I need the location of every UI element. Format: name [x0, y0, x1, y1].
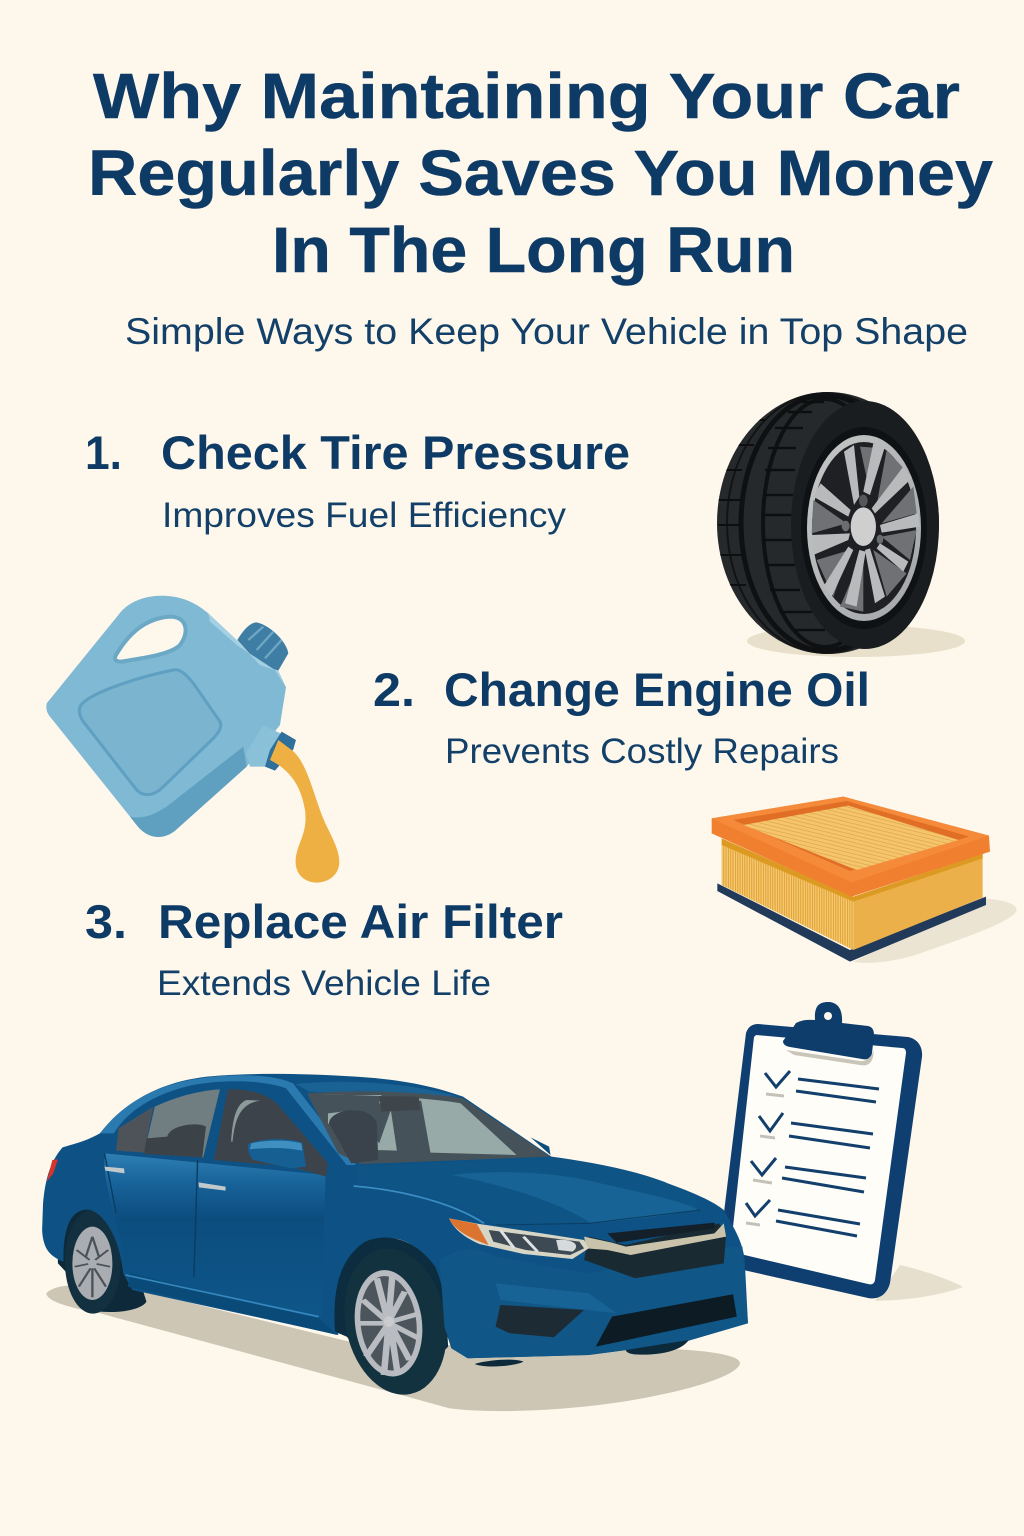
- title: Why Maintaining Your Car: [93, 60, 960, 132]
- clipboard clip: [783, 1002, 874, 1065]
- front lower body: [440, 1247, 748, 1358]
- headlight: [449, 1218, 589, 1259]
- step 3: replace air filter: Replace Air Filter: [158, 895, 563, 948]
- clipboard shadow: [875, 1265, 963, 1301]
- filter pleats top: [743, 806, 958, 870]
- title: In The Long Run: [272, 214, 795, 286]
- filter base: [717, 883, 986, 962]
- checklist rows: [746, 1071, 879, 1236]
- icon: oil jug: [46, 596, 339, 883]
- icon: air filter: [712, 797, 1017, 963]
- title: Regularly Saves You Money: [88, 137, 993, 209]
- step 1: check tire pressure: Improves Fuel Efficiency: [162, 496, 567, 535]
- windshield: [307, 1091, 551, 1164]
- step 3: replace air filter: Extends Vehicle Life: [157, 964, 491, 1003]
- roof highlight: [100, 1075, 356, 1165]
- jug label panel: [79, 670, 221, 795]
- side mirror: [248, 1139, 306, 1168]
- car body: [42, 1074, 748, 1358]
- rear quarter window: [116, 1107, 153, 1153]
- pour neck: [246, 725, 282, 767]
- jug body: [46, 596, 286, 837]
- jug handle hole: [115, 617, 186, 662]
- chrome grille bar: [584, 1223, 726, 1255]
- lower bumper: [496, 1305, 584, 1337]
- car shadow: [46, 1286, 740, 1411]
- filter shadow: [853, 898, 1017, 963]
- rim spokes: [812, 443, 920, 612]
- step 2: change engine oil: 2.: [373, 663, 415, 716]
- step 1: check tire pressure: [85, 426, 630, 535]
- icon: tire: [717, 392, 965, 657]
- step 2: change engine oil: Prevents Costly Repairs: [445, 732, 839, 771]
- front grille upper: [584, 1223, 726, 1278]
- oil stream: [270, 740, 339, 883]
- step 3: replace air filter: [85, 895, 563, 1003]
- step 1: check tire pressure: Check Tire Pressure: [161, 426, 630, 479]
- icon: clipboard: [719, 1002, 963, 1301]
- step 2: change engine oil: [373, 663, 870, 771]
- doors: [104, 1153, 326, 1317]
- rear wheel: [65, 1210, 146, 1314]
- door handles: [104, 1167, 226, 1191]
- rear door window: [144, 1089, 220, 1157]
- filter left pleats: [722, 838, 853, 950]
- step 1: check tire pressure: 1.: [85, 426, 122, 479]
- rear wheel arch: [58, 1206, 135, 1293]
- icon: car: [42, 1074, 748, 1411]
- subtitle: Simple Ways to Keep Your Vehicle in Top Shape: [125, 311, 968, 352]
- neck ring: [265, 732, 296, 771]
- clipboard paper: [731, 1035, 906, 1284]
- filter frame: [712, 797, 990, 897]
- front wheel arch: [334, 1238, 448, 1393]
- title: [88, 60, 993, 286]
- filter right side: [853, 855, 983, 950]
- hood: [356, 1157, 701, 1225]
- step 3: replace air filter: 3.: [85, 895, 127, 948]
- tail light: [47, 1159, 58, 1182]
- front door window: [214, 1089, 328, 1177]
- clipboard board: [719, 1024, 922, 1298]
- step 2: change engine oil: Change Engine Oil: [444, 663, 870, 716]
- jug cap: [237, 622, 288, 671]
- front wheel: [335, 1245, 456, 1398]
